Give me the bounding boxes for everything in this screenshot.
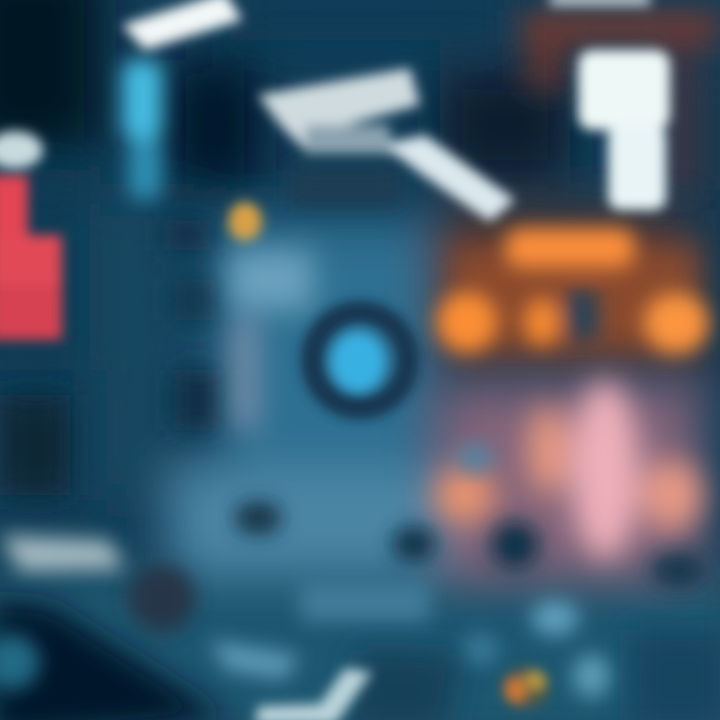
red bars on the left edge (0, 175, 62, 340)
orange glowing arch (437, 228, 708, 353)
pink reflection (435, 380, 702, 560)
dark round knobs (128, 501, 706, 632)
top right red-brown structure (520, 10, 720, 190)
light blue lower-left patch (0, 634, 40, 690)
multicolor indicator (501, 667, 549, 709)
dark shadow below streaks (290, 165, 400, 205)
bottom dark diagonal band (0, 600, 720, 720)
white top highlight (122, 0, 242, 50)
pale blue column (228, 250, 313, 430)
cyan vertical bar (122, 60, 162, 200)
circular dial (312, 312, 408, 408)
central white streaks (258, 68, 515, 222)
white lamp top right (550, 0, 670, 210)
left dark panel (0, 220, 220, 495)
amber dot (228, 202, 262, 242)
blue spot in reflection (457, 445, 493, 471)
white strip at bottom (255, 668, 372, 720)
bottom keyboard area (0, 535, 612, 698)
diagonal light strip (210, 640, 300, 680)
white block on the left edge (0, 131, 43, 169)
